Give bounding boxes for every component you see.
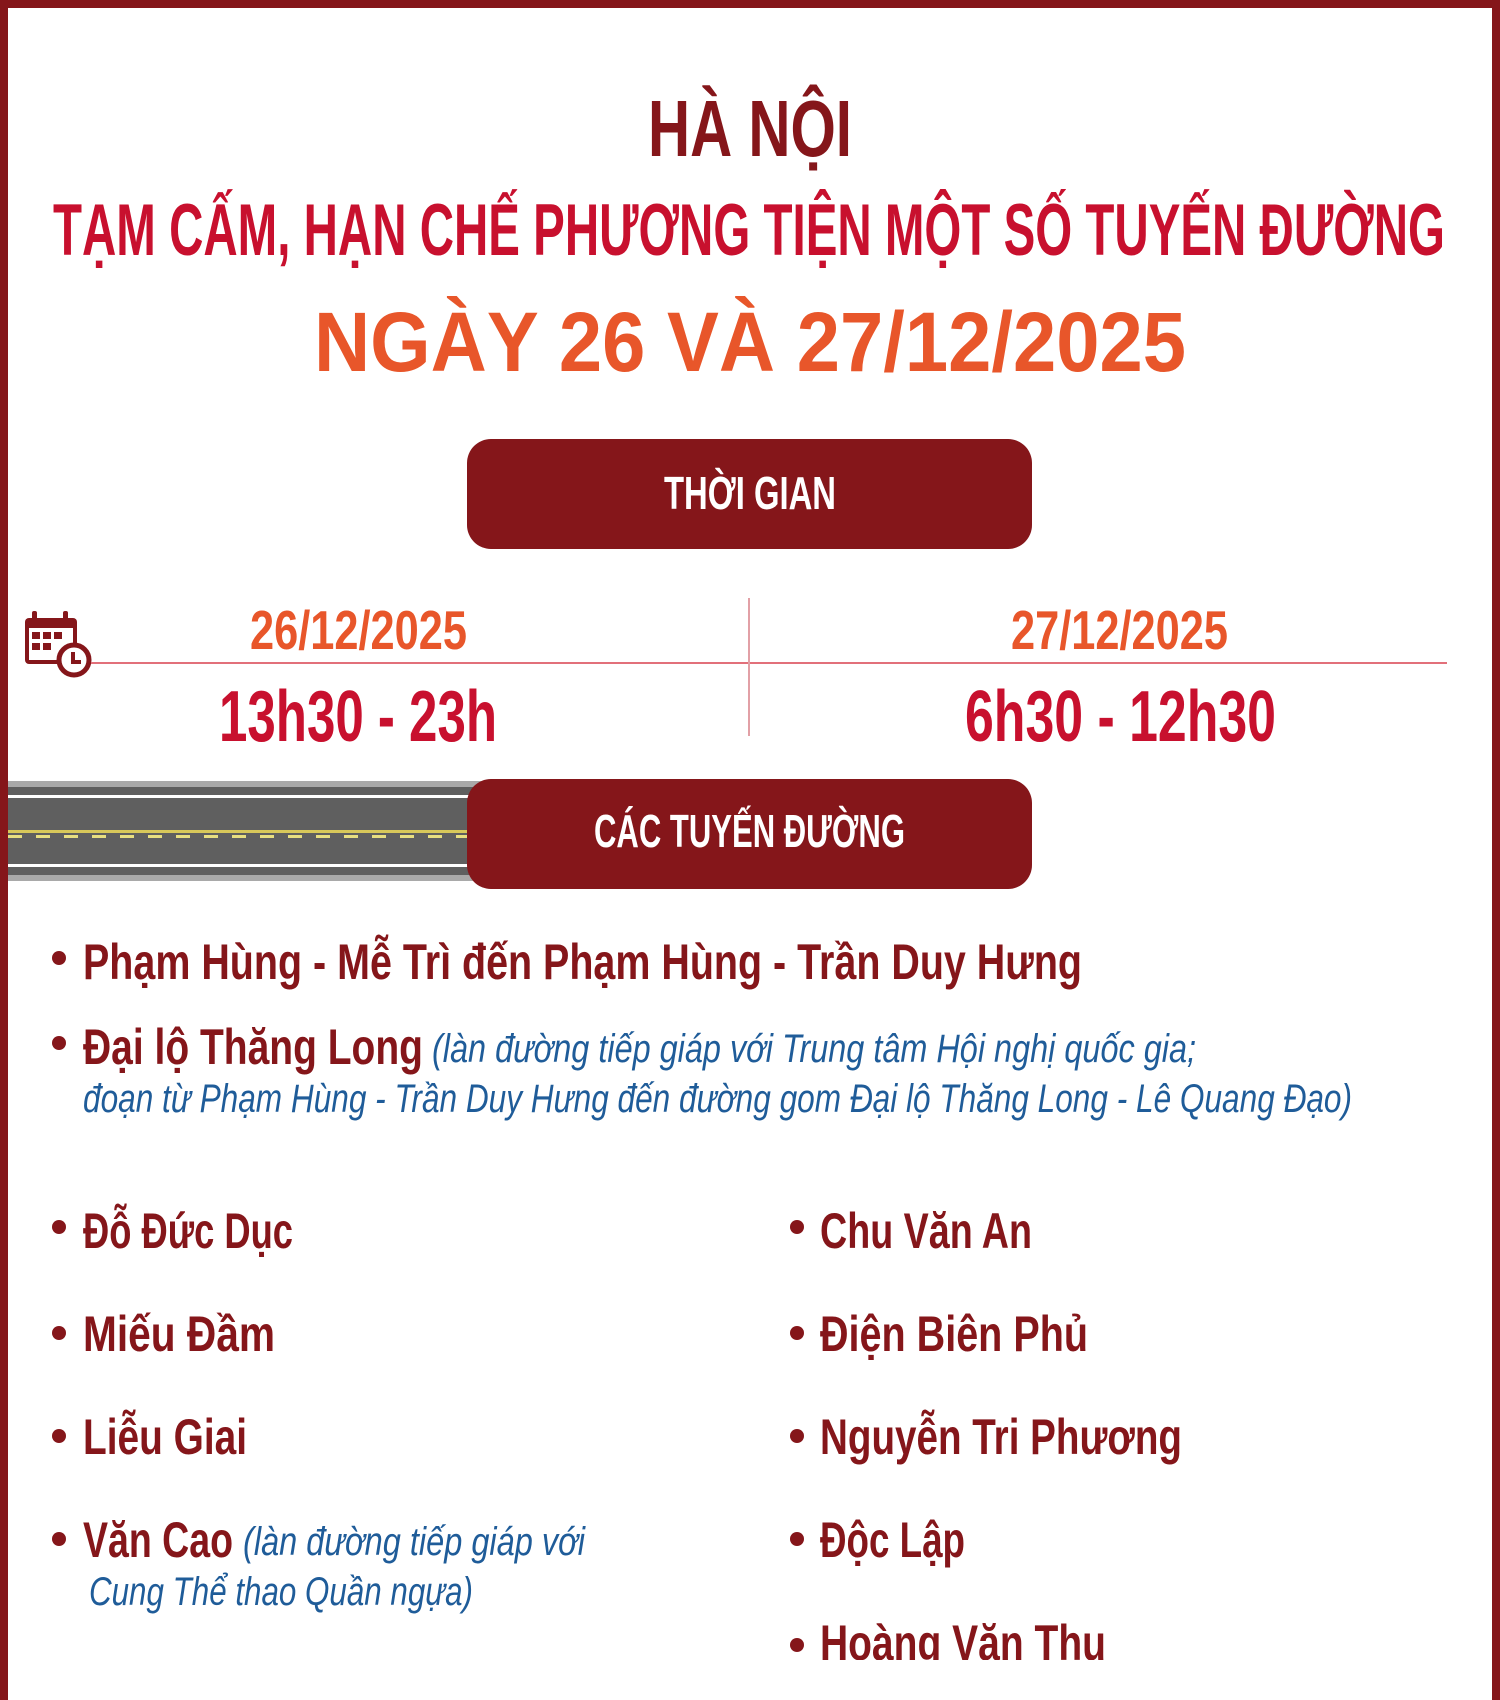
route: Đỗ Đức Dục <box>52 1203 293 1259</box>
title: dates: NGÀY 26 VÀ 27/12/2025 <box>314 295 1186 389</box>
time 2: 6h30 - 12h30 <box>965 677 1276 757</box>
route: Liễu Giai <box>52 1409 247 1465</box>
route: Văn Cao <box>52 1512 586 1614</box>
route: Chu Văn An: Chu Văn An <box>820 1203 1032 1259</box>
button: các tuyến đường: CÁC TUYẾN ĐƯỜNG <box>594 805 905 857</box>
time 1: 13h30 - 23h <box>219 677 497 757</box>
route: Đỗ Đức Dục: Đỗ Đức Dục <box>83 1203 293 1259</box>
route: Văn Cao: (làn đường tiếp giáp với <box>243 1520 586 1564</box>
route: Điện Biên Phủ: Điện Biên Phủ <box>820 1306 1088 1362</box>
icon: calendar clock <box>25 611 89 675</box>
route: Chu Văn An <box>790 1203 1032 1259</box>
route 2: (làn đường tiếp giáp với Trung tâm Hội nghị quốc gia; <box>432 1027 1196 1071</box>
button: thời gian: THỜI GIAN <box>664 467 836 519</box>
route: Độc Lập: Độc Lập <box>820 1512 965 1568</box>
route: Miếu Đầm: Miếu Đầm <box>83 1306 275 1362</box>
date 2: 27/12/2025 <box>1011 599 1228 661</box>
route: Hoàng Văn Thụ <box>790 1615 1106 1671</box>
route list <box>52 934 1352 1671</box>
road graphic <box>8 781 488 881</box>
title: Hà Nội: HÀ NỘI <box>648 84 852 173</box>
route: Văn Cao: Cung Thể thao Quần ngựa) <box>89 1570 473 1614</box>
route: Nguyễn Tri Phương: Nguyễn Tri Phương <box>820 1409 1182 1465</box>
route: Liễu Giai: Liễu Giai <box>83 1409 247 1465</box>
route 2: Đại lộ Thăng Long <box>83 1019 423 1075</box>
route 1: Phạm Hùng - Mễ Trì đến Phạm Hùng - Trần Duy Hưng <box>83 934 1082 990</box>
date 1: 26/12/2025 <box>250 599 467 661</box>
route 2 <box>52 1019 1352 1121</box>
route: Văn Cao: Văn Cao <box>83 1512 233 1568</box>
button: thời gian <box>467 439 1032 549</box>
route: Độc Lập <box>790 1512 965 1568</box>
button: các tuyến đường <box>467 779 1032 889</box>
